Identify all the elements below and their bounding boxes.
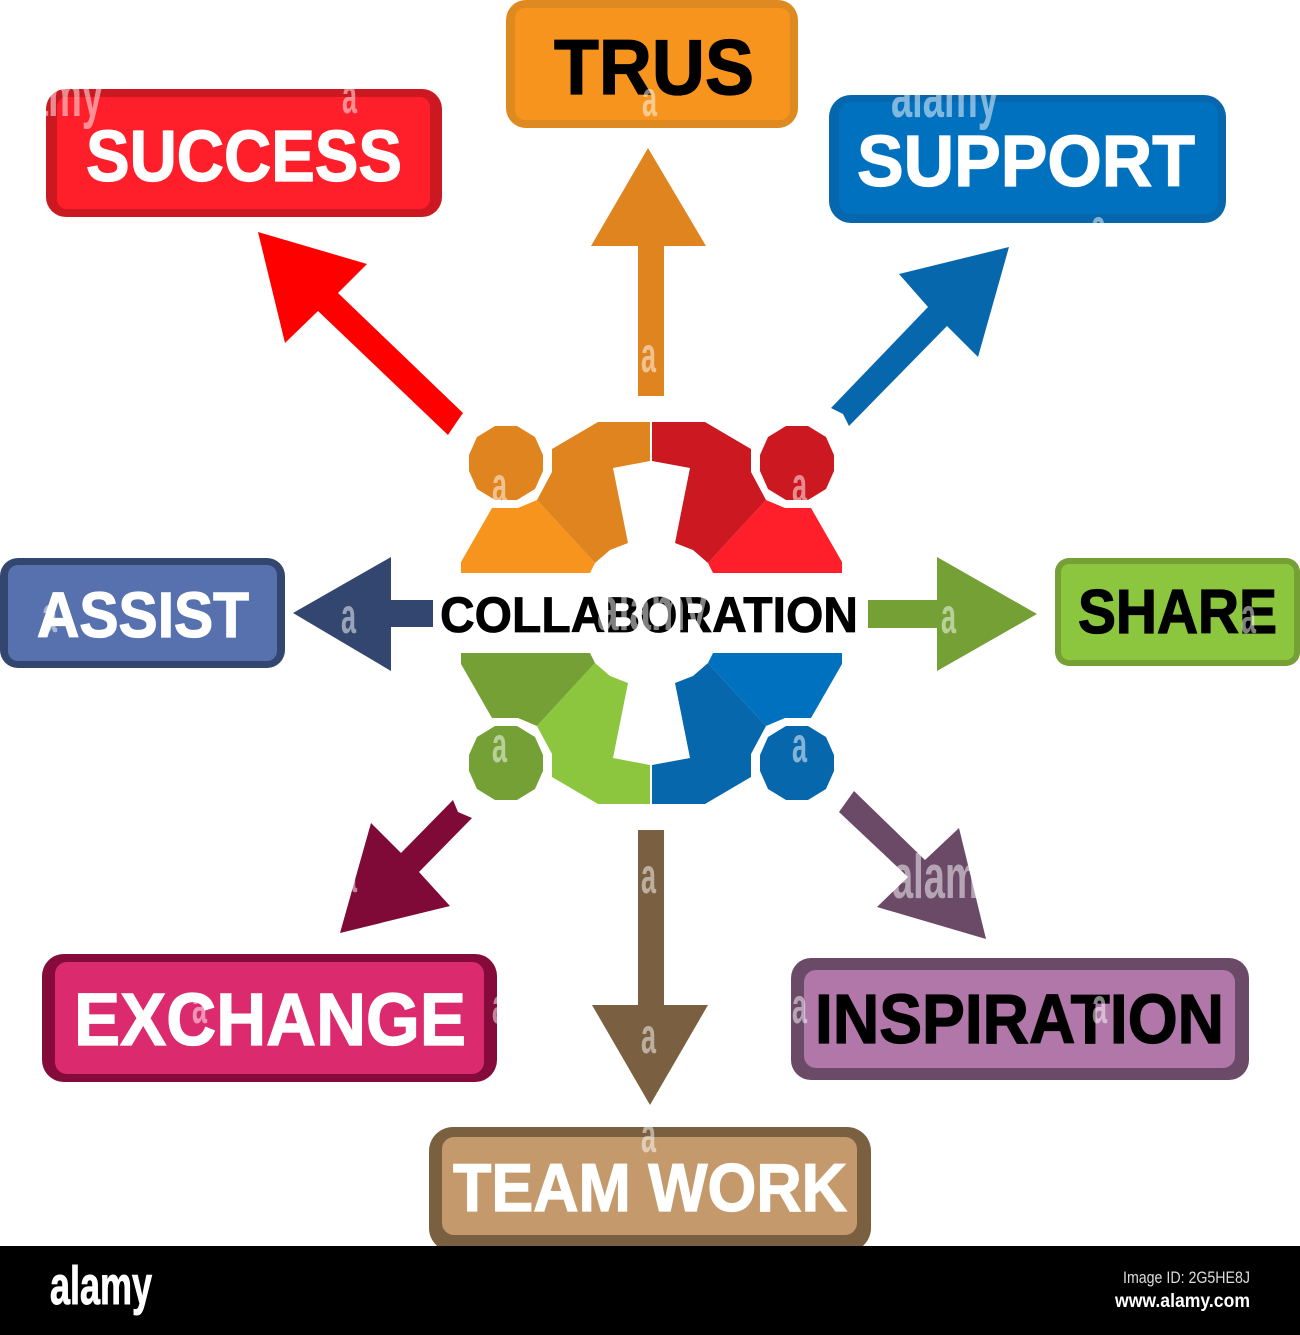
watermarks: a <box>641 1107 657 1163</box>
arrow: to share <box>868 557 1037 671</box>
arrow: to team work <box>592 830 708 1105</box>
arrow: to exchange <box>340 800 472 933</box>
watermarks: a <box>642 71 658 127</box>
watermarks: a <box>192 978 208 1034</box>
watermarks: a <box>342 68 358 124</box>
watermarks <box>0 61 1257 1163</box>
arrow: to assist <box>293 557 433 671</box>
watermarks: a <box>1092 978 1108 1034</box>
arrow: to support <box>831 247 1009 426</box>
label box: success <box>46 89 442 217</box>
label box: exchange <box>42 954 497 1082</box>
label box: team work <box>429 1127 871 1252</box>
center title: COLLABORATION <box>440 587 858 643</box>
footer image id: Image ID: 2G5HE8J <box>1123 1268 1250 1287</box>
footer logo: alamy <box>50 1256 152 1316</box>
watermarks: alamy <box>0 61 103 130</box>
watermarks: a <box>492 717 508 773</box>
label box: support: SUPPORT <box>857 122 1195 202</box>
watermarks: a <box>492 978 508 1034</box>
watermarks: a <box>641 1008 657 1064</box>
person: green <box>461 653 650 804</box>
label box: trust: TRUS <box>554 23 754 111</box>
watermarks: a <box>342 847 358 903</box>
watermarks: a <box>1091 199 1107 255</box>
label box: support <box>829 95 1226 223</box>
watermarks: a <box>42 587 58 643</box>
label box: success: SUCCESS <box>86 117 402 197</box>
label box: inspiration: INSPIRATION <box>815 980 1224 1058</box>
arrow: to success <box>258 232 463 435</box>
label box: team work: TEAM WORK <box>453 1150 847 1226</box>
watermarks: a <box>1241 588 1257 644</box>
label box: share <box>1055 558 1300 666</box>
watermarks: a <box>941 588 957 644</box>
footer url: www.alamy.com <box>1114 1291 1250 1312</box>
person: red <box>652 422 842 573</box>
person: orange <box>461 422 650 573</box>
watermarks: alamy <box>891 62 999 131</box>
watermarks: a <box>641 327 657 383</box>
label box: share: SHARE <box>1078 578 1277 647</box>
label box: inspiration <box>791 958 1249 1080</box>
label box: trust <box>506 0 798 128</box>
label box: assist <box>0 558 285 668</box>
watermarks: a <box>492 457 508 513</box>
label box: assist: ASSIST <box>37 579 249 651</box>
label box: exchange: EXCHANGE <box>74 978 466 1061</box>
watermarks: a <box>792 457 808 513</box>
watermarks: a <box>792 717 808 773</box>
watermarks: alamy <box>892 843 1000 912</box>
footer bar <box>0 1246 1300 1335</box>
watermarks: alamy <box>597 575 707 644</box>
person: blue <box>652 653 842 804</box>
arrow: to trust <box>591 148 706 396</box>
watermarks: a <box>792 978 808 1034</box>
watermarks: a <box>341 588 357 644</box>
arrow: to inspiration <box>839 791 986 939</box>
watermarks: a <box>641 848 657 904</box>
